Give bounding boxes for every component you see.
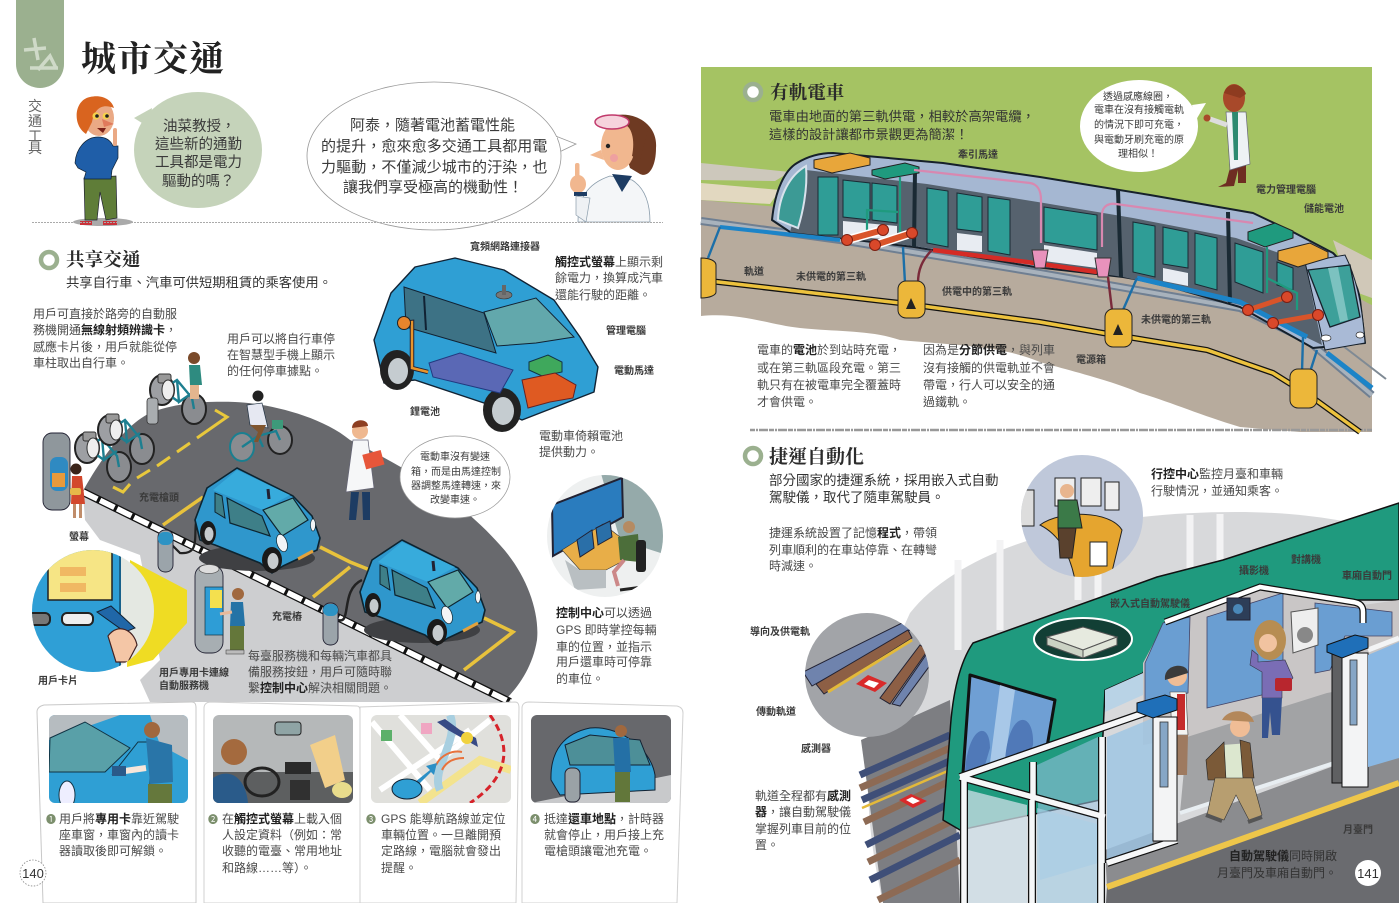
step card 1: 座車窗，車窗內的讀卡 <box>59 827 179 842</box>
panel: tram <box>701 67 1386 432</box>
tram labels: 軌道 <box>744 265 764 278</box>
text: sensors: 軌道全程都有感測 <box>755 788 851 803</box>
text: RFID card: 車柱取出自行車。 <box>33 355 129 370</box>
step card 3: ❸ <box>366 814 376 826</box>
illustration: bike kiosk and user <box>43 433 85 518</box>
text: battery charging: 才會供電。 <box>757 395 817 409</box>
text: RFID card: 用戶可直接於路旁的自動服 <box>33 306 177 321</box>
step card 2 <box>204 702 360 903</box>
speech bubble: boy: 這些新的通勤 <box>155 135 242 153</box>
step 4 image <box>531 715 671 803</box>
text: battery charging <box>757 342 901 409</box>
step card 1 <box>37 702 196 903</box>
illustration: metro station <box>860 503 1399 903</box>
speech bubble: no gearbox: 改變車速。 <box>430 493 480 506</box>
speech bubble: professor: 的提升，愈來愈多交通工具都用電 <box>321 137 548 155</box>
station labels: 嵌入式自動駕駛儀 <box>1110 597 1190 610</box>
illustration: card kiosk and user <box>195 564 245 654</box>
character: woman professor <box>570 115 656 222</box>
text: bike parking: 用戶可以將自行車停 <box>227 331 335 346</box>
panel: shared transport heading: 共享交通 <box>66 246 141 272</box>
tram heading: 這樣的設計讓都市景觀更為簡潔！ <box>769 126 968 142</box>
street labels <box>38 491 302 692</box>
tram heading <box>745 79 1035 142</box>
station labels: 攝影機 <box>1239 564 1269 577</box>
speech bubble: professor <box>307 82 576 230</box>
step card 4: 電槍頭讓電池充電。 <box>544 843 652 858</box>
section side label: 通 <box>28 113 42 129</box>
tram labels <box>744 148 1344 366</box>
text: control centre: 控制中心可以透過 <box>556 605 652 620</box>
text: control centre: 車的位置，並指示 <box>556 639 652 654</box>
section side label: 工 <box>28 128 42 144</box>
speech bubble: induction <box>1080 80 1206 172</box>
text: service button: 繫控制中心解決相關問題。 <box>248 680 392 695</box>
divider <box>32 222 663 224</box>
character: professor on road <box>346 420 385 520</box>
text: battery charging: 電車的電池於到站時充電， <box>757 342 901 357</box>
heading: metro automation: 部分國家的捷運系統，採用嵌入式自動 <box>769 472 998 488</box>
illustration: operations centre lens <box>1020 455 1143 580</box>
text: battery: 電動車倚賴電池 <box>539 429 623 443</box>
title: 城市交通 <box>81 32 225 82</box>
text: doors: 月臺門及車廂自動門。 <box>1217 865 1337 880</box>
car labels: 管理電腦 <box>606 324 646 337</box>
text: control centre: 用戶還車時可停靠 <box>556 654 652 669</box>
illustration: charging posts <box>158 530 338 645</box>
speech bubble: professor: 阿泰，隨著電池蓄電性能 <box>350 117 515 134</box>
text: bike parking: 的任何停車據點。 <box>227 363 323 378</box>
step card 3: 提醒。 <box>381 860 417 875</box>
speech bubble: no gearbox <box>400 436 510 518</box>
step card 4 <box>522 702 683 903</box>
text: service button: 每臺服務機和每輛汽車都具 <box>248 648 392 663</box>
tram body <box>772 153 1365 350</box>
text: touch screen: 觸控式螢幕上顯示剩 <box>555 254 663 269</box>
speech bubble: induction: 的情況下即可充電， <box>1094 118 1184 131</box>
text: battery charging: 軌只有在被電車完全覆蓋時 <box>757 377 901 392</box>
page number 141: 141 <box>1357 866 1379 881</box>
text: segmented supply: 沒有接觸的供電軌並不會 <box>923 360 1055 375</box>
text: sensors: 掌握列車目前的位 <box>755 821 851 836</box>
tram labels: 電源箱 <box>1076 353 1106 366</box>
panel: shared transport heading: 共享自行車、汽車可供短期租賃的乘客使用。 <box>66 274 332 290</box>
text: memory program: 捷運系統設置了記憶程式，帶領 <box>769 525 937 540</box>
train <box>943 503 1399 830</box>
character: Prof <box>1204 84 1250 187</box>
text: touch screen: 餘電力，換算成汽車 <box>555 270 663 285</box>
speech bubble: boy <box>134 92 262 208</box>
speech bubble: no gearbox: 器調整馬達轉速，來 <box>411 479 501 492</box>
street labels: 螢幕 <box>69 530 89 543</box>
text: operations centre: 行控中心監控月臺和車輛 <box>1151 466 1283 481</box>
section side label: 交 <box>28 98 42 114</box>
text: operations centre: 行駛情況，並通知乘客。 <box>1151 483 1283 498</box>
step card 3: GPS 能導航路線並定位 <box>381 811 506 826</box>
speech bubble: no gearbox: 電動車沒有變速 <box>420 450 490 463</box>
station labels <box>1110 553 1392 836</box>
speech bubble: professor: 讓我們享受極高的機動性！ <box>343 178 523 196</box>
character: boy <box>73 96 133 226</box>
track bed <box>701 221 1386 395</box>
street labels: 充電樁 <box>272 610 302 623</box>
tram labels: 未供電的第三軌 <box>1141 313 1211 326</box>
platform floor <box>1105 680 1399 903</box>
text: segmented supply: 帶電，行人可以安全的通 <box>923 377 1055 392</box>
text: segmented supply: 過鐵軌。 <box>923 394 971 409</box>
text: doors <box>1217 848 1337 880</box>
illustration: card lens <box>32 550 187 672</box>
tram labels: 未供電的第三軌 <box>796 270 866 283</box>
step card 1: 器讀取後即可解鎖。 <box>59 843 167 858</box>
station labels: 車廂自動門 <box>1342 569 1392 582</box>
text: service button: 備服務按鈕，用戶可隨時聯 <box>248 664 392 679</box>
step card 2: 和路線……等）。 <box>222 860 312 875</box>
text: bike parking <box>227 331 335 378</box>
tram heading: 電車由地面的第三軌供電，相較於高架電纜， <box>769 108 1035 124</box>
ground <box>701 163 1372 432</box>
speech bubble: boy: 驅動的嗎？ <box>162 173 234 190</box>
text: memory program <box>769 525 937 573</box>
step card 3 <box>360 702 519 903</box>
text: RFID card: 務機開通無線射頻辨識卡， <box>33 322 177 337</box>
speech bubble: boy: 工具都是電力 <box>155 154 242 171</box>
step 2 image <box>213 715 353 803</box>
speech bubble: professor: 力驅動，不僅減少城市的汙染，也 <box>321 159 548 176</box>
text: segmented supply <box>923 342 1055 409</box>
step card 4: ❹ <box>530 814 540 826</box>
text: memory program: 時減速。 <box>769 558 817 573</box>
text: RFID card: 感應卡片後，用戶就能從停 <box>33 339 177 354</box>
chapter tab <box>16 0 64 88</box>
text: battery: 提供動力。 <box>539 444 599 459</box>
step card 4: 就會停止，用戶接上充 <box>544 827 664 842</box>
illustration: parked electric cars <box>172 468 485 645</box>
speech bubble: induction: 透過感應線圈， <box>1103 90 1173 103</box>
text: sensors <box>755 788 851 852</box>
heading: metro automation: 捷運自動化 <box>769 442 864 469</box>
text: bike parking: 在智慧型手機上顯示 <box>227 347 335 362</box>
feed wires and power boxes <box>701 227 1317 408</box>
illustration: guide rail lens <box>803 613 934 737</box>
rail labels: 導向及供電軌 <box>750 625 810 638</box>
tram labels: 電力管理電腦 <box>1256 183 1316 196</box>
text: control centre: 的車位。 <box>556 671 604 686</box>
section side label <box>28 98 42 156</box>
car labels <box>410 240 654 418</box>
heading: metro automation: 駕駛儀，取代了隨車駕駛員。 <box>769 490 944 505</box>
step card 3: 定路線，電腦就會發出 <box>381 843 501 858</box>
step card 3: 車輛位置。一旦離開預 <box>381 827 501 842</box>
rail labels <box>750 625 831 755</box>
illustration: large cutaway car <box>374 258 598 432</box>
text: doors: 自動駕駛儀同時開啟 <box>1229 848 1337 863</box>
track bed <box>860 700 960 903</box>
text: control centre <box>556 605 657 686</box>
illustration: bikes and riders <box>75 352 292 482</box>
step card 2: ❷ <box>208 814 218 826</box>
text: service button <box>248 648 392 695</box>
third rails <box>720 227 1372 388</box>
platform screen doors <box>960 635 1399 903</box>
panel: shared transport heading <box>41 246 332 290</box>
text: control centre: GPS 即時掌控每輛 <box>556 622 657 637</box>
step card 1: ❶ <box>46 814 56 826</box>
speech bubble: induction: 理相似！ <box>1118 147 1158 160</box>
station labels: 月臺門 <box>1343 823 1373 836</box>
illustration: control centre lens <box>547 470 670 597</box>
text: touch screen: 還能行駛的距離。 <box>555 287 651 302</box>
text: sensors: 置。 <box>755 838 779 852</box>
section side label: 具 <box>28 140 42 156</box>
page number 140 <box>20 860 46 886</box>
speech bubble: induction: 電車在沒有接觸電軌 <box>1094 103 1184 116</box>
passengers <box>1165 620 1293 822</box>
power modules and cables <box>814 153 1328 328</box>
step card 4: 抵達還車地點，計時器 <box>544 811 664 826</box>
car labels: 鋰電池 <box>410 405 440 418</box>
step card 1: 用戶將專用卡靠近駕駛 <box>59 811 179 826</box>
street labels: 自動服務機 <box>159 679 209 692</box>
tram labels: 供電中的第三軌 <box>942 285 1012 298</box>
step card 2: 在觸控式螢幕上載入個 <box>222 811 342 826</box>
text: segmented supply: 因為是分節供電，與列車 <box>923 342 1055 357</box>
station labels: 對講機 <box>1291 553 1321 566</box>
tram labels: 牽引馬達 <box>958 148 998 161</box>
step 1 image <box>49 715 188 809</box>
step 3 image <box>371 715 511 803</box>
car labels: 電動馬達 <box>614 364 654 377</box>
page number 141 <box>1355 860 1381 886</box>
tram labels: 儲能電池 <box>1304 202 1344 215</box>
page number 140: 140 <box>22 866 44 881</box>
rail labels: 感測器 <box>801 742 831 755</box>
street labels: 用戶專用卡連線 <box>159 666 229 679</box>
text: RFID card <box>33 306 177 370</box>
text: sensors: 器，讓自動駕駛儀 <box>755 804 851 819</box>
car labels: 寬頻網路連接器 <box>470 240 540 253</box>
illustration: road and sidewalk <box>83 402 537 702</box>
step card 2: 人設定資料（例如：常 <box>222 827 342 842</box>
yellow power cable <box>701 280 1360 432</box>
street labels: 用戶卡片 <box>38 674 78 687</box>
text: battery charging: 或在第三軌區段充電。第三 <box>757 360 901 375</box>
text: memory program: 列車順利的在車站停靠、在轉彎 <box>769 542 937 557</box>
speech bubble: boy: 油菜教授， <box>163 118 236 135</box>
step card 2: 收聽的電臺、常用地址 <box>222 843 342 858</box>
text: battery <box>539 429 623 459</box>
text: touch screen <box>555 254 663 302</box>
tram heading: 有軌電車 <box>770 79 844 105</box>
heading: metro automation <box>745 442 998 505</box>
speech bubble: no gearbox: 箱，而是由馬達控制 <box>411 465 501 478</box>
rail labels: 傳動軌道 <box>756 705 796 718</box>
text: operations centre <box>1151 466 1283 498</box>
street labels: 充電槍頭 <box>139 491 179 504</box>
speech bubble: induction: 與電動牙刷充電的原 <box>1094 133 1184 146</box>
